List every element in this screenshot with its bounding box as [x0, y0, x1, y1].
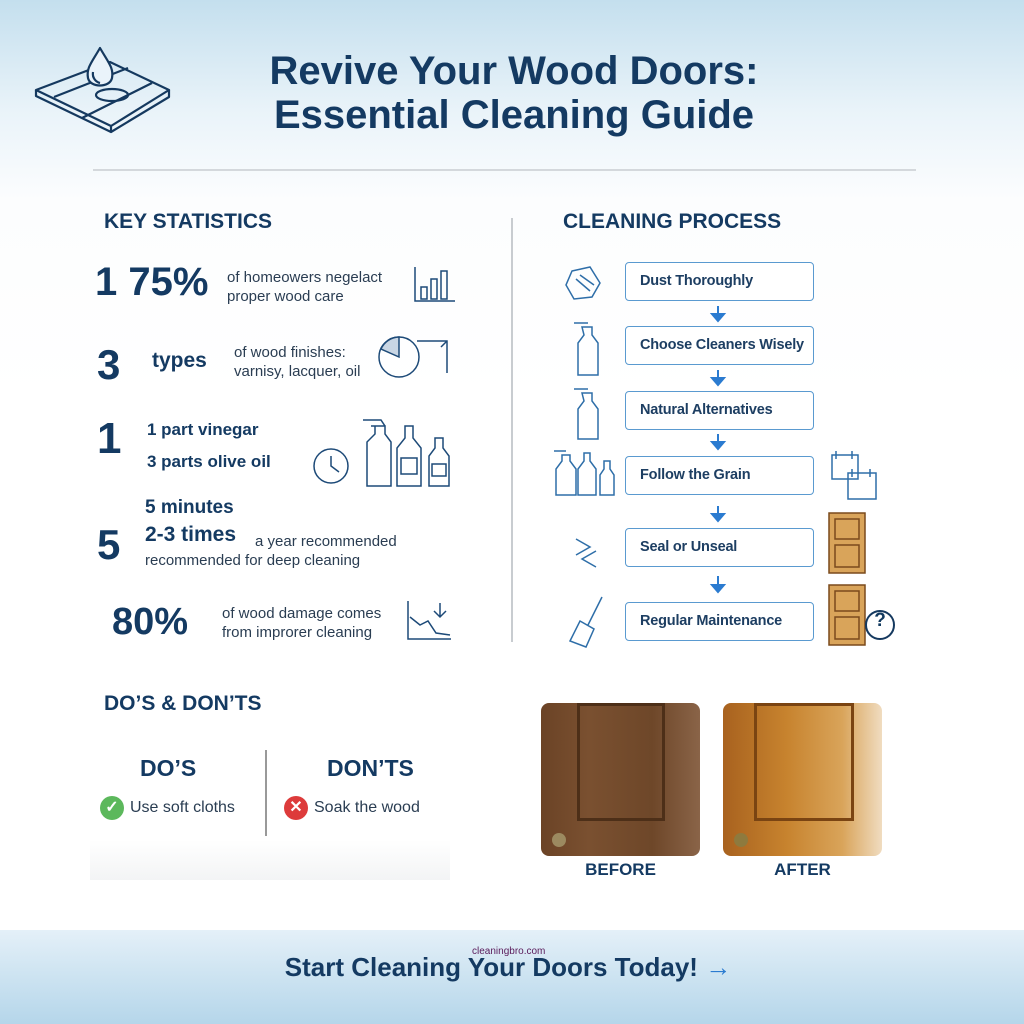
stat vinegar ratio: 1 [97, 414, 121, 463]
panel: do's and don'ts [90, 680, 450, 880]
step 5 [625, 528, 814, 567]
don't item [284, 796, 420, 820]
step 6: Regular Maintenance [640, 613, 782, 629]
call to action: Start Cleaning Your Doors Today! → [285, 952, 731, 982]
stat 5 minutes: recommended for deep cleaning [145, 552, 360, 569]
step 6 [625, 602, 814, 641]
stat 5 minutes: 5 minutes [145, 497, 234, 518]
title: Revive Your Wood Doors: [270, 49, 758, 93]
step 3: Natural Alternatives [640, 402, 772, 418]
stat 5 minutes [97, 497, 397, 569]
stat 75%: proper wood care [227, 288, 344, 305]
step 5: Seal or Unseal [640, 539, 737, 555]
stat 80%: 80% [112, 601, 188, 643]
stat 5 minutes: 2-3 times [145, 523, 236, 546]
stat 80%: of wood damage comes [222, 605, 381, 622]
stat 75%: 1 75% [95, 260, 208, 304]
heading: cleaning process: CLEANING PROCESS [563, 210, 781, 233]
before image [541, 703, 700, 856]
heading: don'ts: DON’TS [327, 755, 414, 781]
icon: question mark: ? [874, 610, 886, 631]
stat 3 types [97, 336, 448, 388]
arrows between steps [710, 306, 726, 594]
footer banner: cleaningbro.com [472, 946, 545, 957]
footer banner [0, 930, 1024, 1024]
stat 3 types: varnisy, lacquer, oil [234, 363, 360, 380]
stat 75%: of homeowers negelact [227, 269, 382, 286]
stat 80% [112, 601, 451, 643]
stat 5 minutes: 5 [97, 521, 120, 568]
step 4: Follow the Grain [640, 467, 750, 483]
step 2: Choose Cleaners Wisely [640, 337, 804, 353]
label: before: BEFORE [585, 860, 656, 879]
heading: key statistics: KEY STATISTICS [104, 210, 272, 233]
stat 3 types: 3 [97, 341, 120, 388]
after image [723, 703, 882, 856]
panel: key statistics [95, 210, 455, 643]
step 1 [625, 262, 814, 301]
do item: ✓ [105, 799, 119, 816]
don't item: ✕ [289, 799, 303, 816]
stat 75% [95, 260, 455, 305]
step 1: Dust Thoroughly [640, 273, 753, 289]
heading: do's & don'ts: DO’S & DON’TS [104, 692, 262, 715]
heading: do's: DO’S [140, 755, 196, 781]
stat 3 types: of wood finishes: [234, 344, 346, 361]
stat vinegar ratio [97, 414, 450, 487]
do item: Use soft cloths [130, 799, 235, 816]
step 2 [625, 326, 814, 365]
stat 5 minutes: a year recommended [255, 533, 397, 550]
icon: wood tile with drop [34, 46, 170, 134]
don't item: Soak the wood [314, 799, 420, 816]
do item [100, 796, 235, 820]
step 4 [625, 456, 814, 495]
stat 80%: from improrer cleaning [222, 624, 372, 641]
step icons [554, 266, 895, 648]
stat 3 types: types [152, 349, 207, 372]
step 3 [625, 391, 814, 430]
stat vinegar ratio: 1 part vinegar [147, 420, 258, 439]
stat vinegar ratio: 3 parts olive oil [147, 452, 271, 471]
title [270, 49, 758, 137]
title: Essential Cleaning Guide [274, 93, 754, 137]
label: after: AFTER [774, 860, 831, 879]
